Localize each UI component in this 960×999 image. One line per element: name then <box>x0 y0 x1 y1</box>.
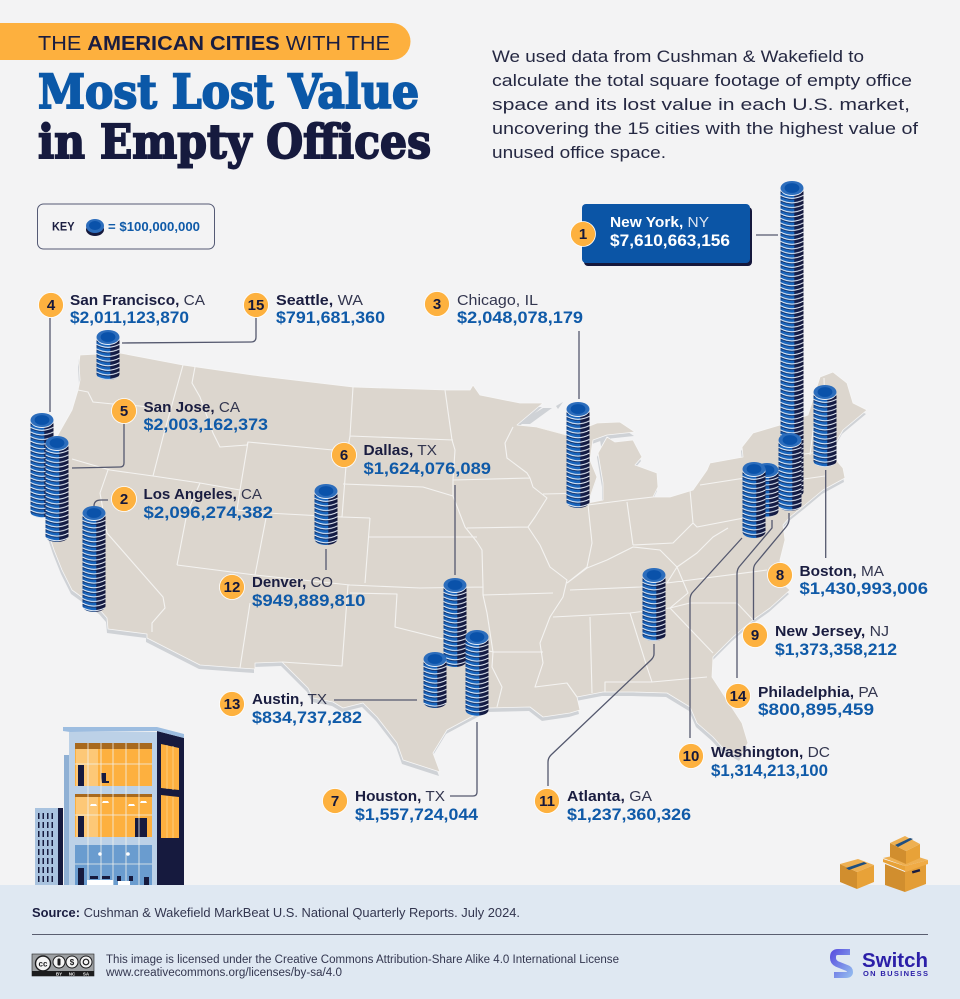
label: Chicago: Chicago, IL <box>457 293 538 309</box>
label: Atlanta: Atlanta, GA <box>567 789 652 805</box>
icon: coin <box>86 219 104 236</box>
label: Dallas: Dallas, TX <box>364 443 437 459</box>
label: San Jose: $2,003,162,373 <box>144 415 268 434</box>
label: Chicago: $2,048,078,179 <box>457 308 583 327</box>
label: Washington: Washington, DC <box>711 745 830 761</box>
label: Atlanta: $1,237,360,326 <box>567 805 691 824</box>
stack: Boston <box>814 385 836 467</box>
label: Denver <box>220 574 366 610</box>
label: New Jersey: New Jersey, NJ <box>775 624 889 640</box>
map: lake shadows <box>517 402 612 452</box>
label: San Francisco: 4 <box>47 297 56 314</box>
stack: Denver <box>314 484 338 545</box>
stack: San Francisco <box>30 413 54 518</box>
leader lines <box>50 235 826 796</box>
label: Dallas: $1,624,076,089 <box>364 459 491 478</box>
label: Houston: $1,557,724,044 <box>355 805 479 824</box>
label: Austin <box>220 692 362 727</box>
label: Houston: Houston, TX <box>355 789 445 805</box>
stack: San Jose <box>46 436 68 542</box>
label: New Jersey: $1,373,358,212 <box>775 640 897 659</box>
icon: creative commons badge: BY <box>56 972 62 976</box>
label: San Francisco <box>38 292 205 327</box>
icon: creative commons badge: cc <box>39 960 48 968</box>
label: Seattle: $791,681,360 <box>276 308 385 327</box>
key <box>38 204 214 249</box>
callout: New York: 1 <box>579 226 587 243</box>
stack: Washington <box>742 462 766 538</box>
label: Philadelphia <box>726 684 878 719</box>
label: Dallas <box>332 442 491 478</box>
map of the United States <box>44 353 867 776</box>
label: Boston <box>768 562 928 598</box>
label: Denver: Denver, CO <box>252 575 333 591</box>
label: Boston: $1,430,993,006 <box>800 579 928 598</box>
callout: New York: New York, NY <box>610 215 709 231</box>
intro text: calculate the total square footage of empty office <box>492 71 912 90</box>
stack: Philadelphia <box>756 463 778 517</box>
label: Boston: 8 <box>776 567 784 584</box>
label: Los Angeles: $2,096,274,382 <box>144 503 273 522</box>
title banner <box>0 23 410 60</box>
label: Austin: Austin, TX <box>252 692 327 708</box>
label: Philadelphia: 14 <box>730 688 747 705</box>
label: Atlanta <box>534 788 691 824</box>
label: Houston <box>322 788 479 824</box>
stack: Houston <box>466 630 488 716</box>
key: KEY <box>52 222 75 234</box>
label: Seattle <box>244 292 385 327</box>
stack: Los Angeles <box>82 506 106 612</box>
stack: Atlanta <box>642 568 666 641</box>
label: Washington: $1,314,213,100 <box>711 761 828 780</box>
label: Austin: 13 <box>224 696 240 713</box>
label: Los Angeles: 2 <box>120 491 128 508</box>
footer divider <box>32 934 928 935</box>
icon: creative commons badge: SA <box>83 972 90 976</box>
source: Source: Cushman & Wakefield MarkBeat U.S. National Quarterly Reports. July 2024. <box>32 905 520 920</box>
label: New Jersey: 9 <box>751 627 759 644</box>
label: Washington <box>678 744 830 780</box>
intro text: space and its lost value in each U.S. market, <box>492 95 910 114</box>
stack: Chicago <box>566 402 590 508</box>
label: Los Angeles: Los Angeles, CA <box>144 487 262 503</box>
title banner: THE AMERICAN CITIES WITH THE <box>38 33 390 55</box>
label: San Jose: 5 <box>120 403 128 420</box>
icon: creative commons badge: NC <box>69 972 76 976</box>
intro text: uncovering the 15 cities with the highest value of <box>492 119 918 138</box>
label: Seattle: Seattle, WA <box>276 293 363 309</box>
key: = $100,000,000 <box>108 220 200 234</box>
intro text: We used data from Cushman & Wakefield to <box>492 47 864 66</box>
logo: Switch on Business <box>833 950 928 978</box>
callout: New York <box>570 204 752 266</box>
icon: creative commons badge: $ <box>70 958 75 967</box>
label: Boston: Boston, MA <box>800 564 884 580</box>
label: Atlanta: 11 <box>539 793 555 810</box>
license text: This image is licensed under the Creative Commons Attribution-Share Alike 4.0 International License <box>106 954 619 966</box>
illustration: cardboard boxes <box>840 836 928 892</box>
label: Chicago <box>424 292 583 327</box>
intro text <box>492 47 918 162</box>
illustration: office building <box>35 727 184 885</box>
label: Austin: $834,737,282 <box>252 708 362 727</box>
label: Washington: 10 <box>683 748 699 765</box>
title <box>38 64 431 169</box>
stack: Austin <box>424 652 446 708</box>
label: Philadelphia: $800,895,459 <box>758 700 874 719</box>
label: San Jose: San Jose, CA <box>144 400 240 416</box>
callout: New York: $7,610,663,156 <box>610 231 730 250</box>
icon: creative commons badge <box>32 954 94 976</box>
label: Denver: $949,889,810 <box>252 591 366 610</box>
logo: Switch on Business: ON BUSINESS <box>863 969 928 978</box>
label: Seattle: 15 <box>248 297 264 314</box>
label: Philadelphia: Philadelphia, PA <box>758 685 878 701</box>
footer panel <box>0 885 960 999</box>
label: San Francisco: $2,011,123,870 <box>70 308 189 327</box>
license text <box>105 954 619 979</box>
label: Los Angeles <box>112 486 273 522</box>
title: in Empty Offices <box>38 114 431 169</box>
stack: New Jersey <box>778 433 802 511</box>
label: San Jose <box>112 398 268 434</box>
intro text: unused office space. <box>492 143 666 162</box>
stack: New York <box>780 181 804 498</box>
label: San Francisco: San Francisco, CA <box>70 293 205 309</box>
label: Houston: 7 <box>331 793 339 810</box>
license text: www.creativecommons.org/licenses/by-sa/4.0 <box>105 967 342 979</box>
label: Denver: 12 <box>224 579 240 596</box>
stack: Seattle <box>96 330 120 380</box>
label: Chicago: 3 <box>433 296 441 313</box>
label: Dallas: 6 <box>340 447 348 464</box>
label: New Jersey <box>742 622 897 659</box>
stack: Dallas <box>444 578 466 667</box>
logo: Switch on Business: Switch <box>862 950 928 972</box>
title: Most Lost Value <box>38 64 419 119</box>
